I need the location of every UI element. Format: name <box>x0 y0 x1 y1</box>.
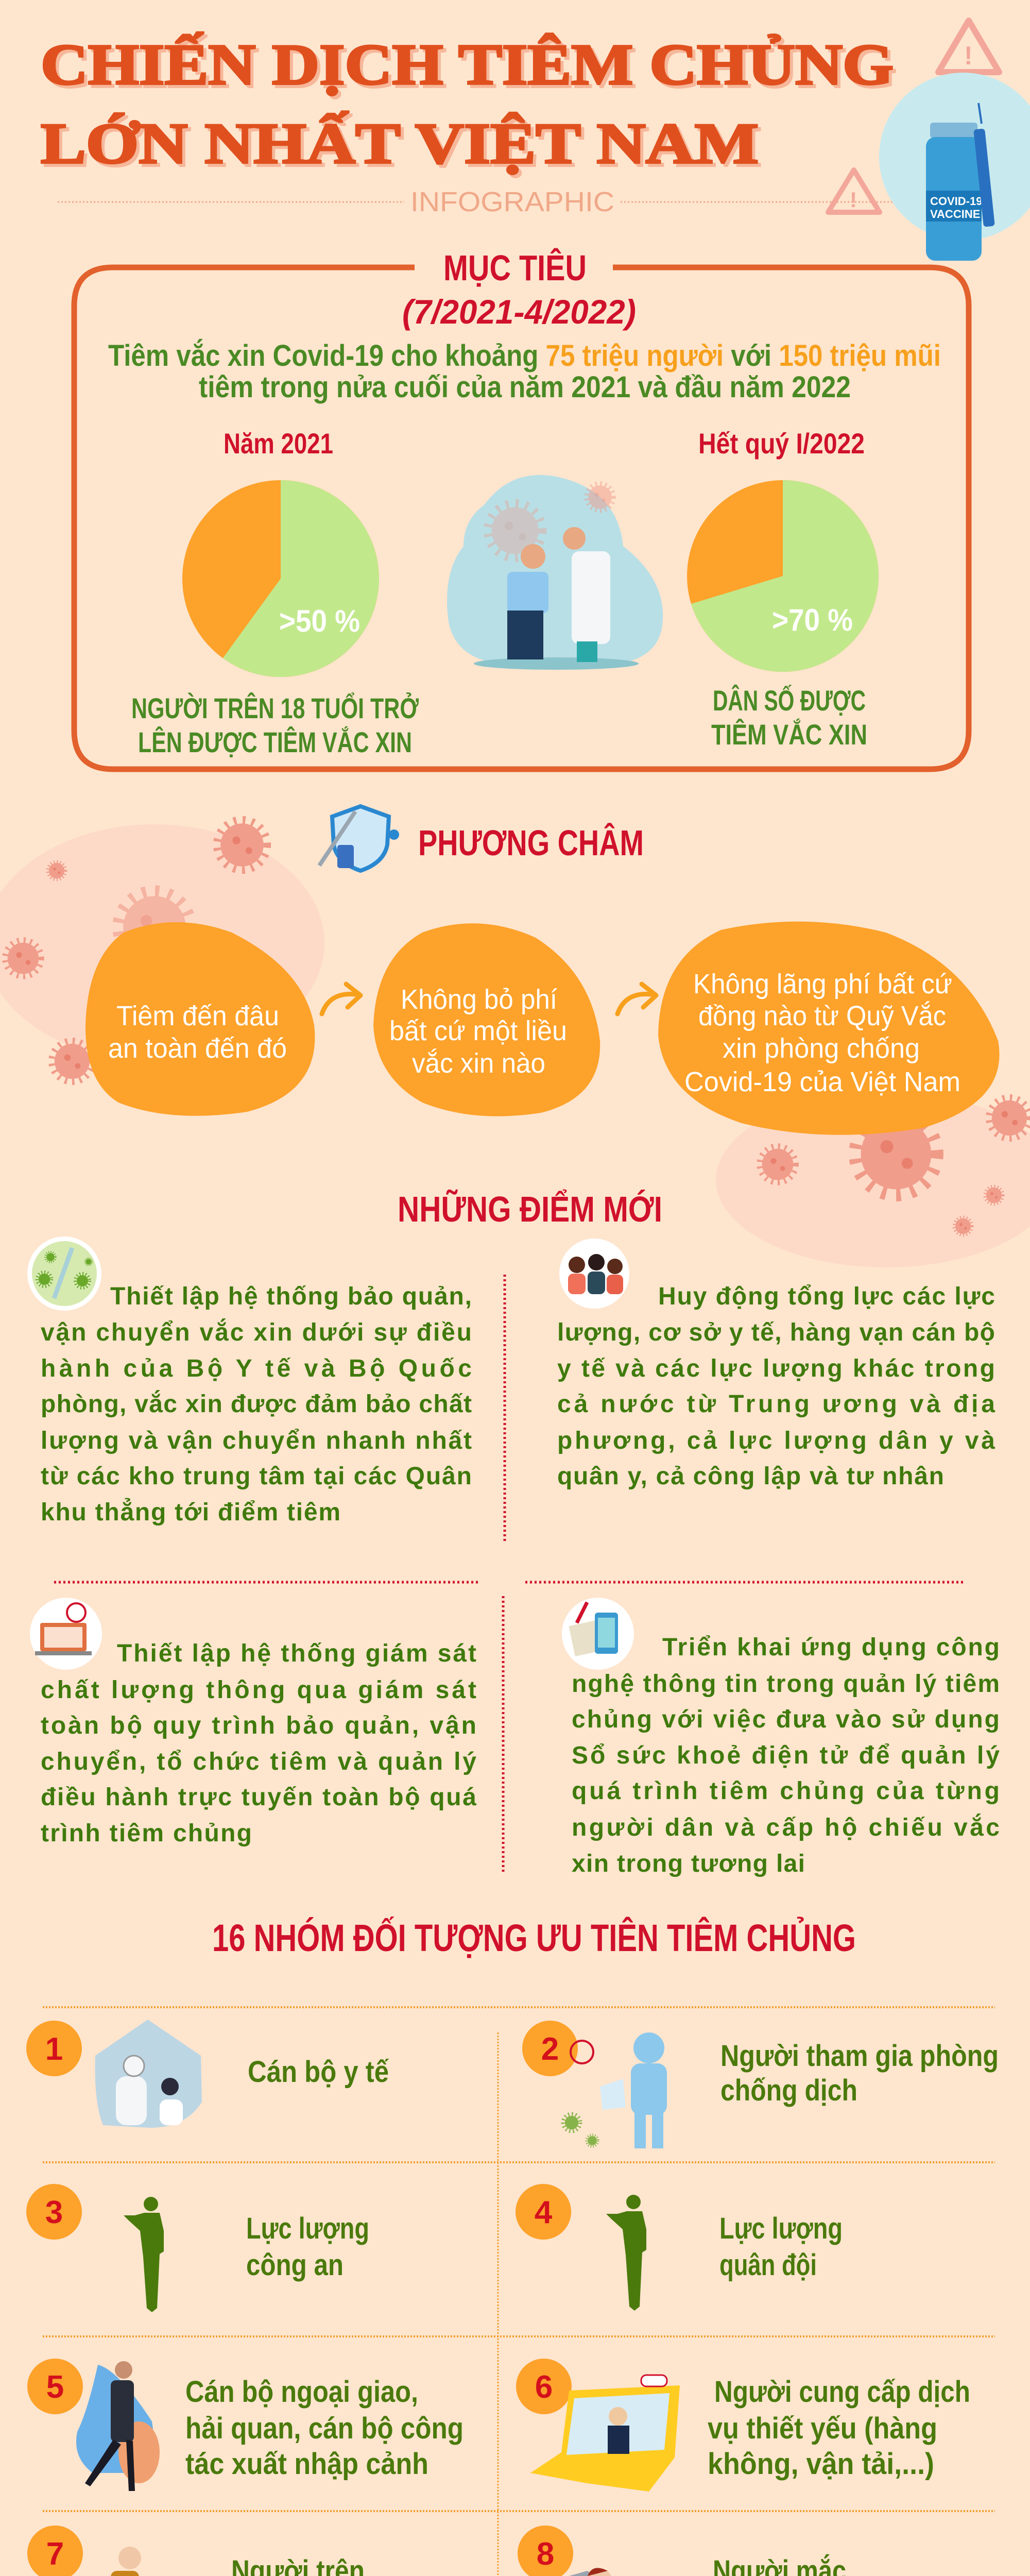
icon: health worker <box>95 2020 202 2128</box>
blob: tiem den dau <box>85 922 315 1116</box>
label: nguoi tren 18: NGƯỜI TRÊN 18 TUỔI TRỞ <box>131 692 419 724</box>
date: (7/2021-4/2022) <box>402 293 636 331</box>
icon: hospital bed <box>551 2568 711 2576</box>
panel: diem moi 3: chất lượng thông qua giám sát <box>41 1676 476 1704</box>
icon: warning triangles <box>828 21 999 212</box>
panel: diem moi 1: vận chuyển vắc xin dưới sự điều <box>41 1318 472 1346</box>
background: pink virus decorations <box>0 820 1030 1267</box>
title <box>41 32 897 179</box>
blob: khong bo phi: vắc xin nào <box>412 1048 545 1079</box>
icon: police silhouette <box>124 2197 164 2312</box>
blob: khong lang phi: xin phòng chống <box>723 1033 920 1064</box>
panel: diem moi 2 <box>557 1239 995 1490</box>
panel: diem moi 4: chủng với việc đưa vào sử dụng <box>572 1706 1000 1733</box>
item 6: vụ thiết yếu (hàng <box>708 2412 937 2445</box>
pie chart 2022: >70 % <box>772 603 853 637</box>
panel: diem moi 4: Triển khai ứng dụng công <box>662 1634 1000 1661</box>
item 1: 1 <box>45 2031 63 2067</box>
panel: diem moi 3: điều hành trực tuyến toàn bộ quá <box>41 1784 476 1811</box>
item 7: 7 <box>46 2536 64 2572</box>
illustration: vaccination <box>447 475 663 670</box>
icon: people <box>559 1239 629 1309</box>
arrow <box>322 984 360 1014</box>
panel: diem moi 3: trình tiêm chủng <box>41 1820 252 1847</box>
pie chart 2022 <box>687 480 879 672</box>
blob: khong bo phi <box>373 923 600 1116</box>
blob: khong lang phi: Covid-19 của Việt Nam <box>684 1066 960 1097</box>
item 3: 3 <box>45 2195 63 2230</box>
item 2: chống dịch <box>720 2074 857 2107</box>
panel: diem moi 4: xin trong tương lai <box>572 1850 805 1877</box>
goal text <box>108 339 941 404</box>
panel: diem moi 1: từ các kho trung tâm tại các Quân <box>41 1463 472 1490</box>
title: CHIẾN DỊCH TIÊM CHỦNG <box>41 32 894 97</box>
icon: covid vaccine vial <box>879 73 1030 261</box>
heading: phuong cham <box>319 806 644 871</box>
panel: diem moi 4: quá trình tiêm chủng của từng <box>572 1777 1000 1805</box>
blob: khong lang phi: đồng nào từ Quỹ Vắc <box>698 1001 946 1031</box>
heading: nhung diem moi: NHỮNG ĐIỂM MỚI <box>398 1189 662 1229</box>
blob: tiem den dau: an toàn đến đó <box>108 1033 287 1064</box>
panel: diem moi 1: lượng và vận chuyển nhanh nhất <box>41 1427 472 1454</box>
blob: khong lang phi <box>658 922 1000 1135</box>
title: LỚN NHẤT VIỆT NAM <box>41 111 759 176</box>
panel: diem moi 2: y tế và các lực lượng khác trong <box>557 1355 995 1382</box>
item 6: không, vận tải,...) <box>708 2447 934 2481</box>
panel: diem moi 3: Thiết lập hệ thống giám sát <box>117 1640 476 1667</box>
heading: 16 nhom: 16 NHÓM ĐỐI TƯỢNG ƯU TIÊN TIÊM CHỦNG <box>212 1917 856 1959</box>
item 8: 8 <box>537 2536 554 2572</box>
subtitle: infographic: INFOGRAPHIC <box>410 187 614 217</box>
panel: diem moi 4: người dân và cấp hộ chiếu vắc <box>572 1813 1000 1841</box>
label: nam 2021: Năm 2021 <box>224 427 333 460</box>
item 2 <box>522 2021 999 2148</box>
icon: warning triangles: ! <box>964 41 973 70</box>
item 4: quân đội <box>719 2248 817 2282</box>
icon: soldier silhouette <box>606 2195 646 2311</box>
icon: covid vaccine vial: VACCINE <box>930 208 980 221</box>
label: nguoi tren 18: LÊN ĐƯỢC TIÊM VẮC XIN <box>138 726 412 758</box>
heading: phuong cham: PHƯƠNG CHÂM <box>418 822 644 863</box>
panel: diem moi 2: quân y, cả công lập và tư nhân <box>557 1463 944 1490</box>
icon: covid vaccine vial: COVID-19 <box>930 195 982 208</box>
item 6 <box>516 2359 970 2492</box>
item 2: 2 <box>541 2031 559 2067</box>
panel: diem moi 2: Huy động tổng lực các lực <box>658 1283 995 1310</box>
item 8 <box>518 2526 888 2576</box>
icon: monitoring laptop <box>30 1598 102 1670</box>
panel: diem moi 3: chuyển, tổ chức tiêm và quản lý <box>41 1748 476 1775</box>
blob: khong bo phi: bất cứ một liều <box>389 1015 567 1046</box>
item 3: công an <box>246 2248 344 2282</box>
blob: khong lang phi: Không lãng phí bất cứ <box>693 969 952 999</box>
label: dan so <box>711 684 867 751</box>
pie chart 2021 <box>182 480 379 677</box>
title: CHIẾN DỊCH TIÊM CHỦNG <box>44 36 897 100</box>
panel: diem moi 1 <box>27 1236 472 1526</box>
item 6: 6 <box>535 2369 553 2405</box>
panel: diem moi 3 <box>30 1598 476 1847</box>
item 5: 5 <box>46 2369 64 2405</box>
panel: diem moi 3: toàn bộ quy trình bảo quản, vận <box>41 1712 476 1739</box>
blob: khong bo phi: Không bỏ phí <box>401 984 557 1015</box>
label: nguoi tren 18 <box>131 692 419 758</box>
icon: elderly man <box>88 2547 157 2576</box>
item 4: 4 <box>535 2195 553 2230</box>
panel: diem moi 1: phòng, vắc xin được đảm bảo chất <box>41 1389 472 1418</box>
panel: muc tieu <box>74 247 969 769</box>
panel: diem moi 2: cả nước từ Trung ương và địa <box>557 1391 995 1418</box>
icon: phone and document <box>562 1598 634 1670</box>
icon: taxi driver <box>530 2375 680 2492</box>
item 6: Người cung cấp dịch <box>714 2375 970 2409</box>
title: LỚN NHẤT VIỆT NAM <box>44 114 762 179</box>
blob: tiem den dau: Tiêm đến đâu <box>116 1001 279 1031</box>
label: dan so: TIÊM VẮC XIN <box>711 718 867 751</box>
pie chart 2021: >50 % <box>279 604 360 638</box>
panel: diem moi 2: lượng, cơ sở y tế, hàng vạn cán bộ <box>557 1319 995 1346</box>
label: dan so: DÂN SỐ ĐƯỢC <box>713 684 866 717</box>
item 3 <box>26 2184 369 2312</box>
goal text: tiêm trong nửa cuối của năm 2021 và đầu năm 2022 <box>199 370 851 404</box>
goal text: Tiêm vắc xin Covid-19 cho khoảng 75 triệu người với 150 triệu mũi <box>108 339 941 372</box>
item 7 <box>27 2526 365 2576</box>
heading: muc tieu: MỤC TIÊU <box>443 247 587 288</box>
item 3: Lực lượng <box>246 2212 369 2245</box>
panel: diem moi 4: Sổ sức khoẻ điện tử để quản lý <box>572 1742 1000 1769</box>
item 5: Cán bộ ngoại giao, <box>185 2375 418 2409</box>
dividers: diem moi <box>54 1275 964 1872</box>
icon: diplomat walking <box>76 2361 160 2491</box>
panel: diem moi 1: Thiết lập hệ thống bảo quản, <box>110 1283 472 1310</box>
icon: syringe circle <box>27 1236 101 1311</box>
item 5: hải quan, cán bộ công <box>185 2412 464 2445</box>
panel: diem moi 1: khu thẳng tới điểm tiêm <box>41 1498 340 1526</box>
panel: diem moi 1: hành của Bộ Y tế và Bộ Quốc <box>41 1355 472 1382</box>
item 1: Cán bộ y tế <box>248 2055 389 2089</box>
arrow <box>617 984 656 1014</box>
panel: diem moi 2: phương, cả lực lượng dân y và <box>557 1427 995 1454</box>
item 4 <box>516 2184 843 2311</box>
item 5: tác xuất nhập cảnh <box>185 2447 428 2481</box>
icon: warning triangles: ! <box>850 188 857 212</box>
icon: shield and syringe <box>319 806 399 871</box>
grid lines: 16 groups <box>33 2007 995 2576</box>
item 1 <box>26 2020 389 2128</box>
panel: diem moi 4: nghệ thông tin trong quản lý tiêm <box>572 1670 1000 1698</box>
label: het quy I/2022: Hết quý I/2022 <box>698 427 865 460</box>
panel: diem moi 4 <box>562 1598 1000 1877</box>
icon: disinfection worker <box>563 2032 667 2148</box>
item 4: Lực lượng <box>719 2212 843 2245</box>
item 5 <box>27 2359 464 2491</box>
